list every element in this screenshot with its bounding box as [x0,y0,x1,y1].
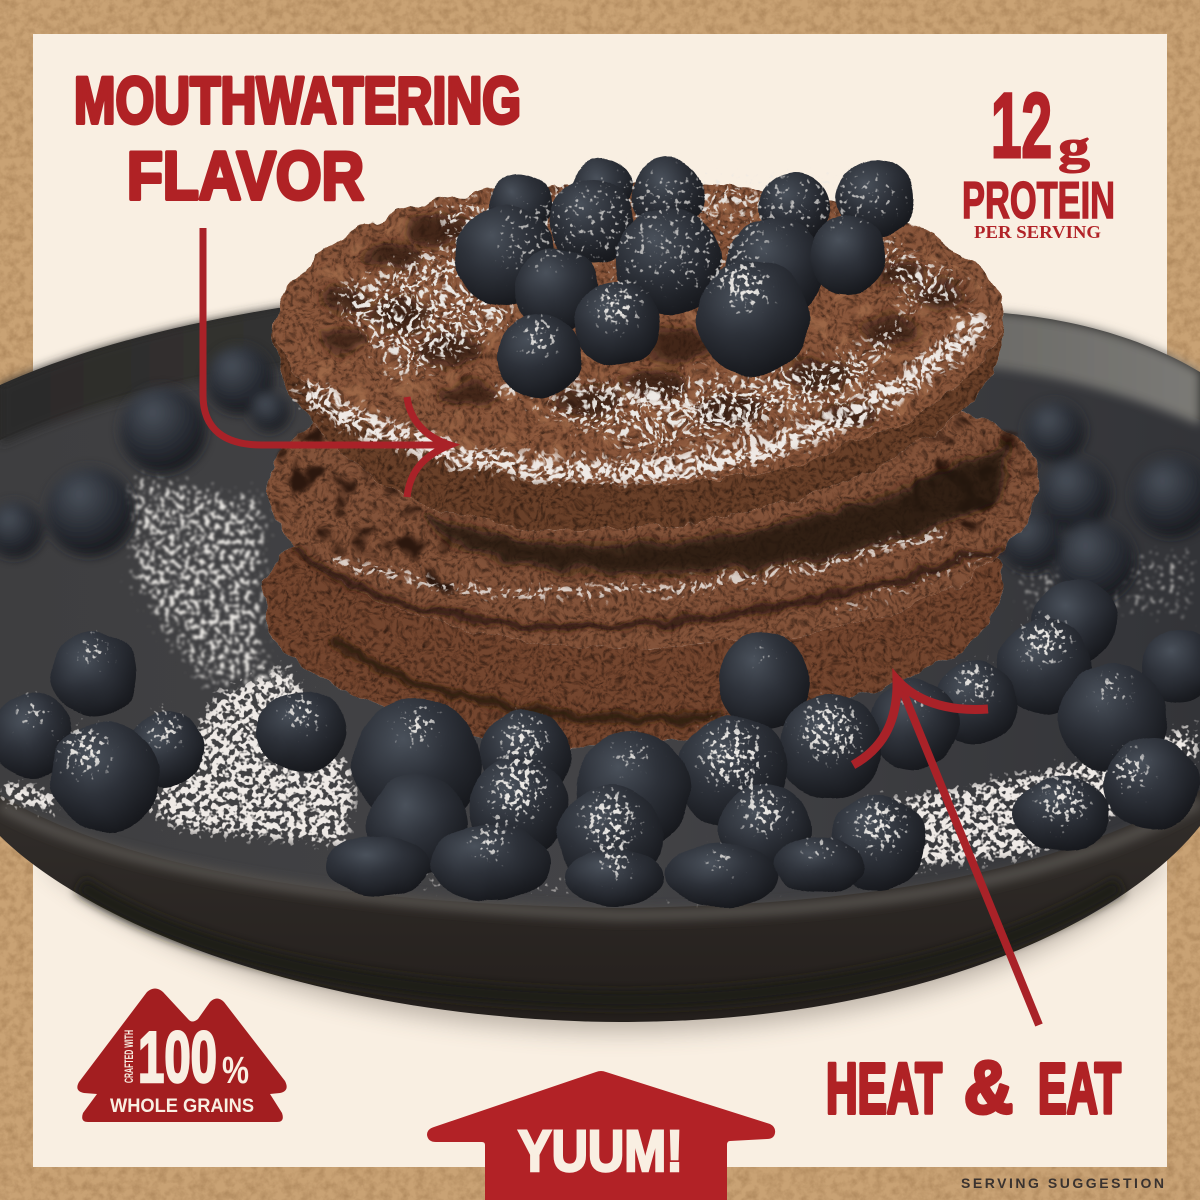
top waffle face [272,183,1005,484]
crack between middle and bottom waffles [295,548,1000,627]
sugar on blueberries [12,170,1154,885]
unit g: g [1058,121,1090,174]
waffle pits [321,216,966,426]
blurred background berries [0,346,1200,602]
crafted with: CRAFTED WITH [122,1030,136,1083]
whole grains badge [77,988,287,1122]
yuum label: YUUM! [518,1119,683,1184]
heat and eat heading: EAT [1038,1050,1121,1129]
sugar on far plate [120,470,1200,690]
arrow shape [427,1071,775,1200]
mountain shape [77,988,287,1122]
sugar on near plate [0,660,1200,905]
waffle face lumps [285,193,990,466]
arrow: heat and eat pointing to waffle [853,680,1039,1025]
bottom waffle [265,510,1003,747]
protein label: PROTEIN [962,172,1115,230]
blueberries on top of waffles [455,158,914,398]
12g figure: 12 [991,75,1052,177]
blueberries on plate [0,580,1200,907]
waffle stack [265,180,1040,747]
per serving label: PER SERVING [974,222,1101,242]
heat and eat heading: HEAT [826,1050,942,1129]
heading line one: MOUTHWATERING [74,63,521,137]
serving suggestion note: SERVING SUGGESTION [961,1175,1164,1191]
plate shadow [40,860,1170,1032]
heat and eat heading: & [964,1046,1013,1129]
middle waffle [268,395,1040,648]
top waffle side [272,183,1005,530]
heading line two: FLAVOR [127,138,364,214]
crack under top waffle [420,440,1010,574]
food photo: waffles on plate with blueberries [0,158,1200,1032]
whole grains label: WHOLE GRAINS [110,1096,254,1117]
plate [0,306,1200,1022]
heading: mouthwatering flavor [74,63,521,214]
arrow: flavor pointing to waffle [203,228,450,497]
sugar on waffles [298,180,995,612]
protein callout [962,75,1115,242]
yuum arrow [427,1071,775,1200]
100 figure: 100 [138,1018,217,1098]
percent sign: % [222,1050,249,1092]
heat and eat heading [826,1046,1121,1129]
pits on middle waffle [268,400,1040,600]
